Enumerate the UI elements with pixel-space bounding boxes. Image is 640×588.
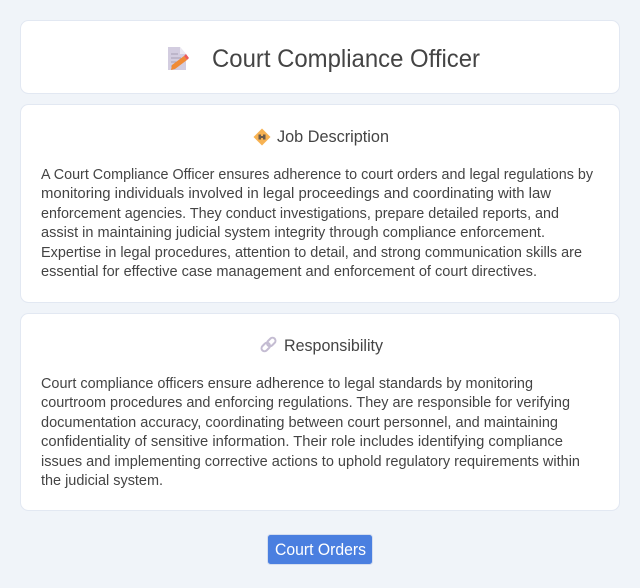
heading: title: Court Compliance Officer xyxy=(212,45,480,73)
icon: warning diamond xyxy=(254,128,270,146)
text block: responsibility: issues and implementing corrective actions to uphold regulatory requirements within xyxy=(41,453,580,470)
panel: job description xyxy=(20,104,620,302)
button: court orders: Court Orders xyxy=(275,541,366,559)
text block: job description: A Court Compliance Officer ensures adherence to court orders and legal regulations by xyxy=(41,166,593,183)
icon: document with pencil xyxy=(168,47,189,70)
text block: responsibility: the judicial system. xyxy=(41,472,163,489)
text block: job description: essential for effective case management and enforcement of court directives. xyxy=(41,263,537,280)
text block: job description: assist in maintaining judicial system integrity through compliance enforcement. xyxy=(41,224,545,241)
panel: title xyxy=(20,20,620,94)
text block: responsibility: confidentiality of sensitive information. Their role includes identifying compliance xyxy=(41,433,563,450)
text block: job description: monitoring individuals involved in legal proceedings and coordinating with law xyxy=(41,185,551,202)
text block: job description xyxy=(41,166,593,280)
text block: responsibility: courtroom procedures and enforcing regulations. They are responsible for verifying xyxy=(41,394,570,411)
panel: responsibility xyxy=(20,314,620,510)
heading: responsibility: Responsibility xyxy=(284,337,384,355)
heading: job description: Job Description xyxy=(277,128,389,146)
text block: responsibility: Court compliance officers ensure adherence to legal standards by monitoring xyxy=(41,375,533,392)
text block: responsibility xyxy=(41,375,580,489)
icon: chain link xyxy=(260,337,277,352)
text block: job description: Expertise in legal procedures, attention to detail, and strong communication skills are xyxy=(41,244,582,261)
text block: job description: enforcement agencies. They conduct investigations, prepare detailed reports, and xyxy=(41,205,559,222)
text block: responsibility: documentation accuracy, coordinating between court personnel, and maintaining xyxy=(41,414,558,431)
button: court orders xyxy=(268,534,372,564)
